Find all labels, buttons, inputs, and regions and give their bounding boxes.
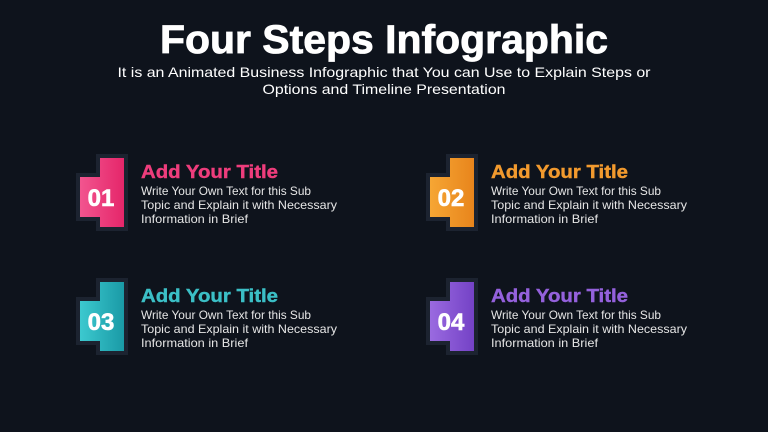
- icon: badge 03: 03: [88, 309, 114, 336]
- text: step 03: Write Your Own Text for this Sub: [141, 308, 311, 322]
- subtitle: Options and Timeline Presentation: [262, 81, 506, 97]
- text: step 04: Add Your Title: [491, 286, 628, 306]
- text: step 01: Topic and Explain it with Necessary: [141, 198, 337, 212]
- text: step 03: Topic and Explain it with Necessary: [141, 322, 337, 336]
- icon: badge 03: [76, 278, 128, 355]
- text: step 01: Add Your Title: [141, 162, 278, 182]
- text: step 02: Add Your Title: [491, 162, 628, 182]
- text: step 04: [491, 286, 687, 350]
- icon: badge 01: 01: [88, 185, 114, 212]
- text: step 02: Write Your Own Text for this Sub: [491, 184, 661, 198]
- text: step 04: Topic and Explain it with Necessary: [491, 322, 687, 336]
- icon: badge 02: 02: [438, 185, 464, 212]
- step 01: [76, 154, 337, 231]
- step 03: [76, 278, 337, 355]
- text: step 02: [491, 162, 687, 226]
- subtitle: [118, 64, 651, 97]
- icon: badge 02: [426, 154, 478, 231]
- subtitle: It is an Animated Business Infographic that You can Use to Explain Steps or: [118, 64, 651, 80]
- icon: badge 01: [76, 154, 128, 231]
- text: step 04: Write Your Own Text for this Sub: [491, 308, 661, 322]
- icon: badge 04: [426, 278, 478, 355]
- text: step 01: [141, 162, 337, 226]
- icon: badge 04: 04: [438, 309, 465, 336]
- step 02: [426, 154, 687, 231]
- title: Four Steps Infographic: [160, 18, 608, 62]
- text: step 01: Write Your Own Text for this Sub: [141, 184, 311, 198]
- text: step 01: Information in Brief: [141, 212, 249, 226]
- step 04: [426, 278, 687, 355]
- text: step 02: Information in Brief: [491, 212, 599, 226]
- text: step 03: Add Your Title: [141, 286, 278, 306]
- text: step 04: Information in Brief: [491, 336, 599, 350]
- text: step 03: [141, 286, 337, 350]
- text: step 02: Topic and Explain it with Necessary: [491, 198, 687, 212]
- text: step 03: Information in Brief: [141, 336, 249, 350]
